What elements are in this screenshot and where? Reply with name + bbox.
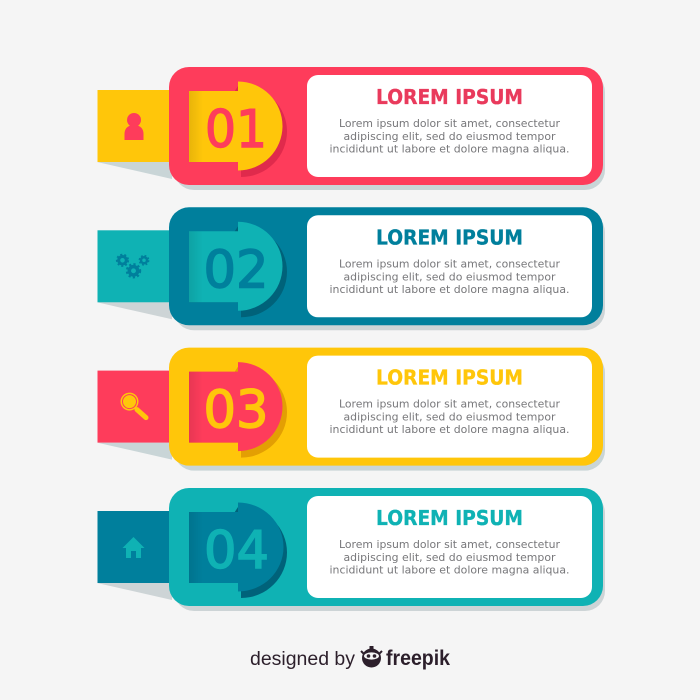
icon: person	[124, 113, 144, 140]
body text 04: incididunt ut labore et dolore magna aliqua.	[330, 564, 570, 576]
body text 01	[330, 117, 570, 156]
heading 02: LOREM IPSUM	[376, 225, 523, 249]
body text 02	[330, 257, 570, 296]
heading 03: LOREM IPSUM	[376, 366, 523, 390]
body text 02: adipiscing elit, sed do eiusmod tempor	[344, 270, 556, 283]
body text 01: Lorem ipsum dolor sit amet, consectetur	[339, 117, 560, 130]
arrow badge 01	[189, 82, 282, 170]
arrow shadow 01	[189, 86, 287, 177]
panel: step 03	[97, 348, 605, 471]
colored band 03	[169, 348, 603, 466]
band shadow 02	[174, 212, 605, 330]
icon: house	[122, 537, 144, 558]
arrow badge 02	[189, 222, 282, 311]
colored band 04	[169, 488, 603, 606]
colored band 01	[169, 67, 603, 185]
text panel 04	[307, 496, 592, 598]
panel: step 02	[97, 207, 605, 330]
icon tab 01	[98, 90, 172, 162]
band shadow 03	[174, 353, 605, 471]
body text 02: incididunt ut labore et dolore magna aliqua.	[330, 283, 570, 296]
icon: freepik mascot	[361, 646, 382, 668]
tab shadow 04	[97, 583, 172, 600]
body text 03: incididunt ut labore et dolore magna aliqua.	[330, 423, 570, 436]
icon: magnifier	[120, 393, 146, 418]
number 02: 02	[204, 240, 268, 300]
body text 02: Lorem ipsum dolor sit amet, consectetur	[339, 257, 560, 270]
footer credit	[250, 646, 450, 670]
arrow fold 03	[189, 372, 203, 443]
body text 01: adipiscing elit, sed do eiusmod tempor	[344, 130, 556, 143]
body text 04: Lorem ipsum dolor sit amet, consectetur	[339, 538, 560, 551]
body text 03: adipiscing elit, sed do eiusmod tempor	[344, 411, 556, 424]
band shadow 04	[174, 493, 605, 611]
arrow fold 04	[189, 512, 203, 583]
arrow badge 03	[189, 362, 282, 451]
panel: step 04	[97, 488, 605, 611]
tab shadow 01	[97, 162, 172, 179]
colored band 02	[169, 207, 603, 325]
arrow shadow 02	[189, 226, 287, 317]
number 01: 01	[205, 100, 267, 160]
arrow shadow 04	[189, 507, 287, 598]
body text 04	[330, 538, 570, 576]
body text 04: adipiscing elit, sed do eiusmod tempor	[344, 551, 556, 564]
freepik wordmark: freepik	[386, 647, 450, 670]
arrow fold 02	[189, 231, 203, 302]
tab shadow 02	[97, 302, 172, 319]
body text 03	[330, 398, 570, 436]
icon tab 02	[98, 230, 172, 302]
arrow badge 04	[189, 502, 284, 592]
arrow fold 01	[189, 91, 203, 162]
band shadow 01	[174, 72, 605, 190]
text panel 01	[307, 75, 592, 177]
icon tab 04	[98, 511, 172, 583]
body text 03: Lorem ipsum dolor sit amet, consectetur	[339, 398, 560, 411]
number 03: 03	[204, 381, 268, 441]
heading 01: LOREM IPSUM	[376, 85, 523, 109]
text panel 02	[307, 215, 592, 317]
designed by text: designed by	[250, 649, 356, 670]
tab shadow 03	[97, 443, 172, 460]
body text 01: incididunt ut labore et dolore magna aliqua.	[330, 142, 570, 156]
heading 04: LOREM IPSUM	[376, 506, 523, 530]
arrow shadow 03	[189, 367, 287, 458]
number 04: 04	[204, 521, 269, 581]
icon: gears	[117, 255, 148, 277]
text panel 03	[307, 356, 592, 458]
icon tab 03	[98, 371, 172, 443]
panel: step 01	[97, 67, 605, 190]
